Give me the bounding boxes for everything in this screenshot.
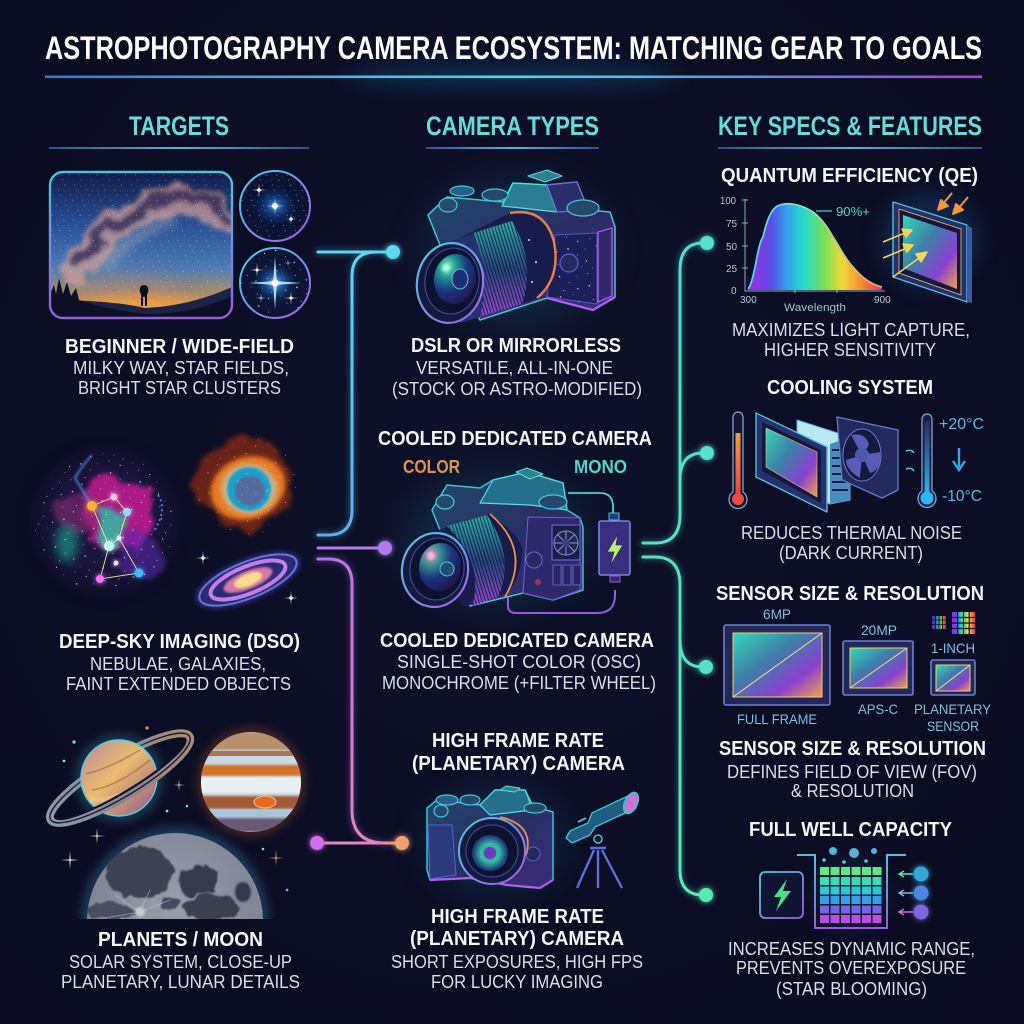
title underline [45,64,982,88]
text: beginner wide-field: BRIGHT STAR CLUSTERS [78,378,281,398]
icon: incoming electrons [899,866,928,920]
text: full well description: (STAR BLOOMING) [776,979,927,999]
text: cooled dedicated camera description [380,630,656,693]
heading: high frame rate camera: (PLANETARY) CAMERA [412,753,625,775]
target image: saturn [41,720,199,836]
diagram: sensor size comparison: 6MP [763,606,791,622]
camera: cooled dedicated with battery [397,468,630,613]
text: beginner wide-field [65,336,294,398]
heading: sensor size and resolution: SENSOR SIZE & RESOLUTION [716,583,984,605]
text: high frame rate camera description: (PLANETARY) CAMERA [410,928,624,950]
text: deep-sky imaging [59,631,300,694]
text: cooled dedicated camera description: MONOCHROME (+FILTER WHEEL) [382,673,656,693]
text: full well description: INCREASES DYNAMIC RANGE, [728,939,975,959]
heading: full well capacity: FULL WELL CAPACITY [749,819,953,841]
text: cooling description: (DARK CURRENT) [779,543,923,563]
target image: orion nebula [35,452,175,592]
text: high frame rate camera description: HIGH FRAME RATE [431,906,604,928]
icon: cold thermometer with temperatures: +20°C [939,416,984,433]
text: dslr or mirrorless: DSLR OR MIRRORLESS [411,335,621,357]
heading: high frame rate camera: HIGH FRAME RATE [432,730,604,752]
chart: quantum efficiency curve [720,196,891,314]
icon: hot thermometer [729,412,747,508]
text: dslr or mirrorless [392,335,642,399]
camera: dslr or mirrorless [412,170,615,327]
column heading: camera types: CAMERA TYPES [426,111,599,141]
diagram: sensor size comparison: 1-INCH [931,640,975,656]
icon: cold thermometer with temperatures: -10°C [942,488,982,505]
text: deep-sky imaging: FAINT EXTENDED OBJECTS [66,674,291,694]
diagram: sensor size comparison [724,606,992,734]
text: planets and moon: SOLAR SYSTEM, CLOSE-UP [69,952,292,972]
icon: cold thermometer with temperatures [918,414,984,507]
text: high frame rate camera description [391,906,643,992]
diagram: sensor size comparison: FULL FRAME [737,711,817,727]
text: sensor size description: SENSOR SIZE & RESOLUTION [719,738,986,760]
diagram: sensor size comparison: APS-C [858,701,898,717]
text: quantum efficiency description: HIGHER SENSITIVITY [764,340,936,360]
diagram: full well pixel grid [797,847,906,929]
text: quantum efficiency description [732,320,970,360]
chart: quantum efficiency curve: 0 [731,286,737,297]
target decoration: stars around planets [61,726,288,891]
connectors: camera types to specs [643,236,714,902]
text: beginner wide-field: MILKY WAY, STAR FIELDS, [73,358,289,378]
text: planets and moon: PLANETS / MOON [98,929,263,951]
text: dslr or mirrorless: (STOCK OR ASTRO-MODIFIED) [392,379,642,399]
icon: battery box [760,872,803,918]
text: quantum efficiency description: MAXIMIZES LIGHT CAPTURE, [732,320,970,340]
text: full well description: PREVENTS OVEREXPOSURE [736,958,966,978]
text: deep-sky imaging: DEEP-SKY IMAGING (DSO) [59,631,300,653]
label: mono: MONO [574,457,627,477]
text: planets and moon: PLANETARY, LUNAR DETAILS [61,972,300,992]
text: cooling description [741,523,962,563]
target image: helix nebula [185,429,305,539]
target image: spiral galaxy [188,540,308,620]
icon: sensor receiving light [880,190,980,303]
text: cooled dedicated camera description: SINGLE-SHOT COLOR (OSC) [397,652,641,672]
text: cooling description: REDUCES THERMAL NOISE [741,523,962,543]
text: high frame rate camera description: SHORT EXPOSURES, HIGH FPS [391,952,643,972]
text: sensor size description: & RESOLUTION [791,781,914,801]
text: full well description [728,939,975,999]
diagram: sensor size comparison: 20MP [861,622,897,638]
chart: quantum efficiency curve: 50 [726,242,738,253]
chart: quantum efficiency curve: 100 [720,196,736,207]
heading: high frame rate camera [412,730,625,775]
column heading: targets: TARGETS [129,111,229,141]
chart: quantum efficiency curve: 75 [726,219,738,230]
text: high frame rate camera description: FOR LUCKY IMAGING [431,972,603,992]
chart: quantum efficiency curve: 900 [874,295,891,306]
target image: jupiter [197,728,305,836]
text: sensor size description [719,738,986,801]
connectors: targets to camera types [310,245,409,850]
text: beginner wide-field: BEGINNER / WIDE-FIELD [65,336,294,358]
chart: quantum efficiency curve: Wavelength [784,302,846,314]
text: cooled dedicated camera description: COOLED DEDICATED CAMERA [380,630,654,652]
target image: moon [76,822,274,919]
diagram: sensor size comparison: PLANETARY [914,701,992,717]
text: dslr or mirrorless: VERSATILE, ALL-IN-ONE [416,358,613,378]
chart: quantum efficiency curve: 25 [726,264,738,275]
icon: cooling sensor, heat sink and fan [756,413,914,512]
heading: cooled dedicated camera: COOLED DEDICATED CAMERA [378,428,652,450]
text: deep-sky imaging: NEBULAE, GALAXIES, [90,654,266,674]
target image: milky way panel [50,172,236,320]
chart: quantum efficiency curve: 90%+ [836,204,870,219]
heading: quantum efficiency: QUANTUM EFFICIENCY (QE) [721,165,978,187]
target image: star field circle [240,171,310,241]
chart: quantum efficiency curve: 300 [740,295,757,306]
camera: planetary [427,786,641,890]
heading: cooling system: COOLING SYSTEM [767,377,933,399]
target image: bright cluster circle [240,248,310,318]
text: planets and moon [61,929,300,992]
label: color: COLOR [403,457,460,477]
text: sensor size description: DEFINES FIELD OF VIEW (FOV) [727,762,977,782]
diagram: sensor size comparison: SENSOR [927,718,979,734]
